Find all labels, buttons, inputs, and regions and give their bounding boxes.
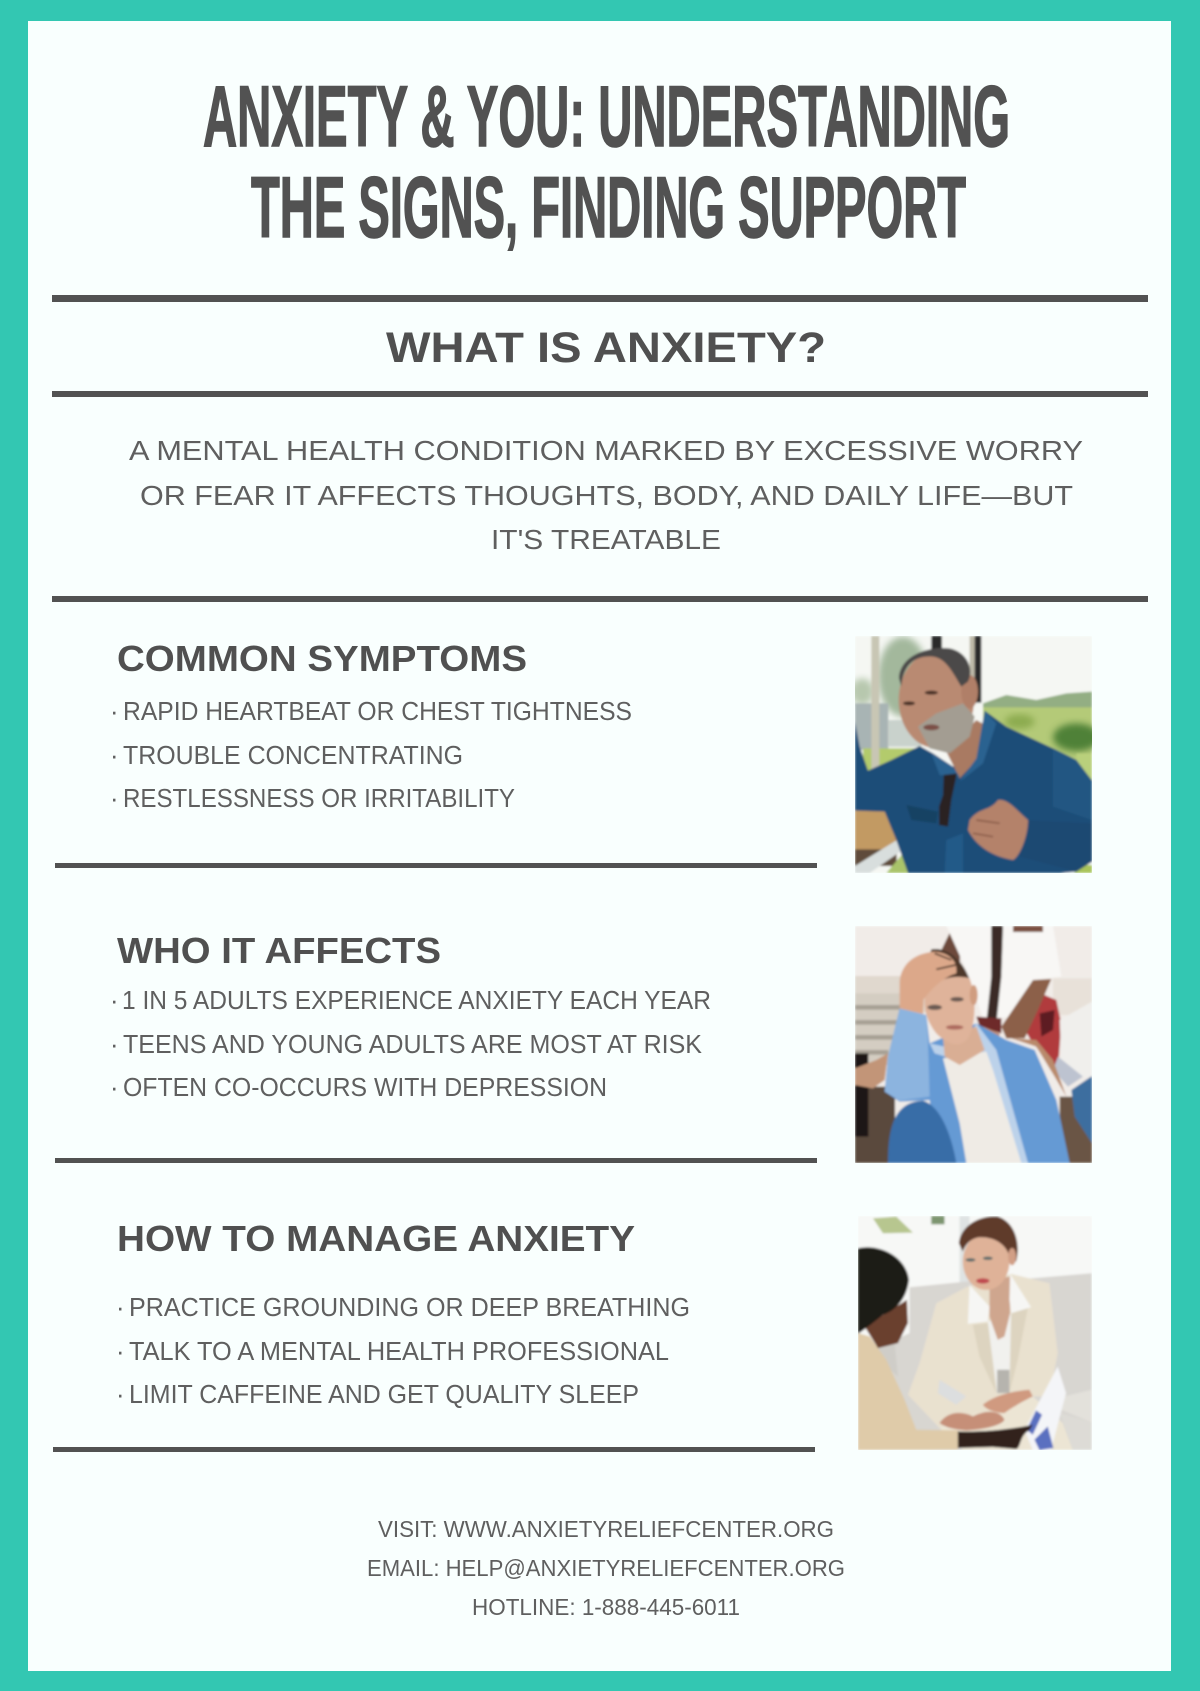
man shirt — [885, 1008, 1070, 1163]
hands — [940, 1412, 1004, 1430]
glasses — [939, 773, 957, 827]
jeans — [888, 1101, 956, 1163]
symptoms list: · — [110, 742, 118, 770]
panel: common symptoms — [55, 638, 817, 868]
heading: how to manage anxiety: HOW TO MANAGE ANXIETY — [117, 1218, 635, 1259]
head — [899, 652, 974, 748]
management tips list: LIMIT CAFFEINE AND GET QUALITY SLEEP — [129, 1381, 639, 1409]
management tips list: · — [116, 1381, 124, 1409]
definition paragraph: OR FEAR IT AFFECTS THOUGHTS, BODY, AND DAILY LIFE—BUT — [140, 480, 1073, 511]
collar — [968, 1285, 989, 1324]
affected groups list: · — [110, 1074, 118, 1102]
shirt — [855, 711, 1092, 873]
affected groups list: · — [110, 987, 118, 1015]
section: what is anxiety — [52, 295, 1148, 602]
symptoms list — [110, 698, 632, 813]
woman behind — [941, 926, 961, 967]
management tips list: · — [116, 1338, 124, 1366]
left woman — [858, 1333, 958, 1450]
management tips list: PRACTICE GROUNDING OR DEEP BREATHING — [129, 1294, 690, 1322]
shirt — [988, 1313, 1011, 1393]
footer contact details: EMAIL: HELP@ANXIETYRELIEFCENTER.ORG — [367, 1555, 845, 1581]
neck — [946, 720, 988, 778]
footer contact details: HOTLINE: 1-888-445-6011 — [472, 1594, 740, 1620]
man neck — [943, 1027, 985, 1065]
footer contact details — [367, 1516, 845, 1620]
management tips list — [116, 1294, 690, 1409]
symptoms list: RESTLESSNESS OR IRRITABILITY — [123, 785, 515, 813]
title — [203, 69, 1010, 256]
affected groups list: · — [110, 1031, 118, 1059]
symptoms list: · — [110, 698, 118, 726]
man hand and forearm — [900, 952, 957, 1014]
woman head — [963, 1233, 1009, 1290]
heading: what is anxiety: WHAT IS ANXIETY? — [386, 324, 826, 372]
affected groups list: OFTEN CO-OCCURS WITH DEPRESSION — [123, 1074, 607, 1102]
definition paragraph — [129, 435, 1083, 555]
report paper — [1024, 1366, 1066, 1450]
woman trousers — [938, 1396, 1073, 1450]
affected groups list: TEENS AND YOUNG ADULTS ARE MOST AT RISK — [123, 1031, 702, 1059]
woman jacket — [908, 1274, 1058, 1428]
photo: counselling session — [858, 1216, 1092, 1450]
right person — [1060, 1002, 1092, 1078]
affected groups list: 1 IN 5 ADULTS EXPERIENCE ANXIETY EACH YEAR — [122, 987, 711, 1015]
sofa — [858, 1273, 1092, 1450]
management tips list: TALK TO A MENTAL HEALTH PROFESSIONAL — [129, 1338, 669, 1366]
man head — [925, 977, 974, 1044]
man hair — [920, 949, 972, 990]
definition paragraph: IT'S TREATABLE — [491, 524, 721, 555]
symptoms list: · — [110, 785, 118, 813]
affected groups list — [110, 987, 711, 1102]
hair — [899, 648, 970, 687]
heading: common symptoms: COMMON SYMPTOMS — [117, 638, 527, 679]
hand — [968, 800, 1028, 860]
photo: man holding chest — [855, 636, 1092, 873]
footer contact details: VISIT: WWW.ANXIETYRELIEFCENTER.ORG — [378, 1516, 834, 1542]
heading: who it affects: WHO IT AFFECTS — [117, 930, 441, 971]
definition paragraph: A MENTAL HEALTH CONDITION MARKED BY EXCESSIVE WORRY — [129, 435, 1083, 466]
symptoms list: RAPID HEARTBEAT OR CHEST TIGHTNESS — [123, 698, 632, 726]
management tips list: · — [116, 1294, 124, 1322]
photo: young man comforted by friends — [855, 926, 1092, 1163]
symptoms list: TROUBLE CONCENTRATING — [123, 742, 463, 770]
panel: how to manage anxiety — [53, 1218, 815, 1452]
panel: who it affects — [55, 930, 817, 1163]
beard — [918, 703, 975, 753]
collar — [931, 753, 960, 777]
